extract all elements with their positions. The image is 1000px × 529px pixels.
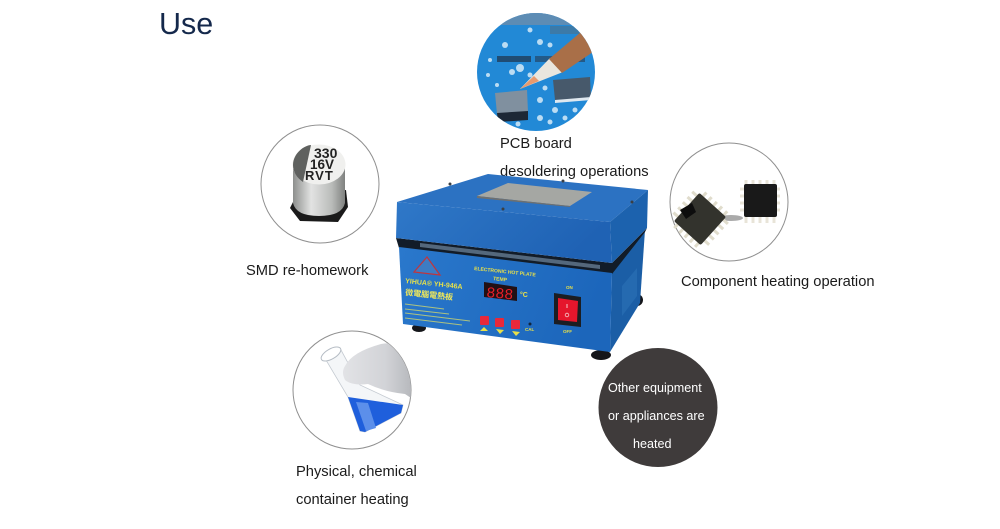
- glove: [343, 343, 414, 400]
- chinese model label: 微電腦電熱板: [405, 287, 454, 302]
- icon: PCB board circle: [476, 12, 596, 132]
- label: Physical, chemical: Physical, chemical: [296, 464, 417, 480]
- icon: flask circle: [293, 331, 414, 449]
- ON label: ON: [566, 285, 573, 290]
- small spec lines: [405, 304, 470, 325]
- icon: SMD capacitor circle: [261, 125, 379, 243]
- control buttons: [480, 316, 532, 336]
- feet: [412, 324, 426, 332]
- brand text: YIHUA® YH-946A: [405, 277, 463, 291]
- body front: [399, 247, 612, 352]
- right chip: [740, 180, 780, 223]
- icon: SMD capacitor circle: 330: [314, 145, 338, 161]
- flask: [323, 350, 403, 432]
- callout: other equipment: or appliances are: [608, 409, 705, 423]
- label: container heating: container heating: [296, 492, 409, 508]
- label: SMD re-homework: SMD re-homework: [246, 263, 369, 279]
- hot plate device: [396, 174, 648, 360]
- lid top: [397, 174, 648, 222]
- label: Component heating operation: Component heating operation: [681, 274, 875, 290]
- screws: [448, 182, 452, 186]
- callout: other equipment: [598, 348, 718, 467]
- soldering iron: [520, 58, 563, 89]
- body right side: [610, 230, 645, 352]
- warning triangle: [414, 257, 440, 275]
- label: desoldering operations: desoldering operations: [500, 164, 649, 180]
- title: Use: [159, 7, 213, 41]
- degree label: °C: [520, 291, 528, 299]
- device heading: ELECTRONIC HOT PLATE: [474, 266, 537, 279]
- icon: component chips circle: [666, 143, 788, 261]
- chip right: [553, 77, 591, 100]
- callout: other equipment: Other equipment: [608, 381, 702, 395]
- LED display: 888: [486, 285, 514, 304]
- CAL label: CAL: [525, 327, 534, 332]
- power switch: [554, 293, 581, 327]
- icon: SMD capacitor circle: RVT: [305, 168, 334, 183]
- callout: other equipment: heated: [633, 437, 672, 451]
- OFF label: OFF: [563, 329, 572, 334]
- icon: SMD capacitor circle: 16V: [310, 157, 334, 172]
- heating plate: [477, 183, 592, 207]
- temp label: TEMP: [493, 276, 508, 284]
- gap between lid and body: [396, 228, 647, 274]
- left chip: [666, 185, 734, 253]
- lid front: [396, 202, 612, 263]
- label: PCB board: PCB board: [500, 136, 572, 152]
- chip left: [495, 90, 528, 114]
